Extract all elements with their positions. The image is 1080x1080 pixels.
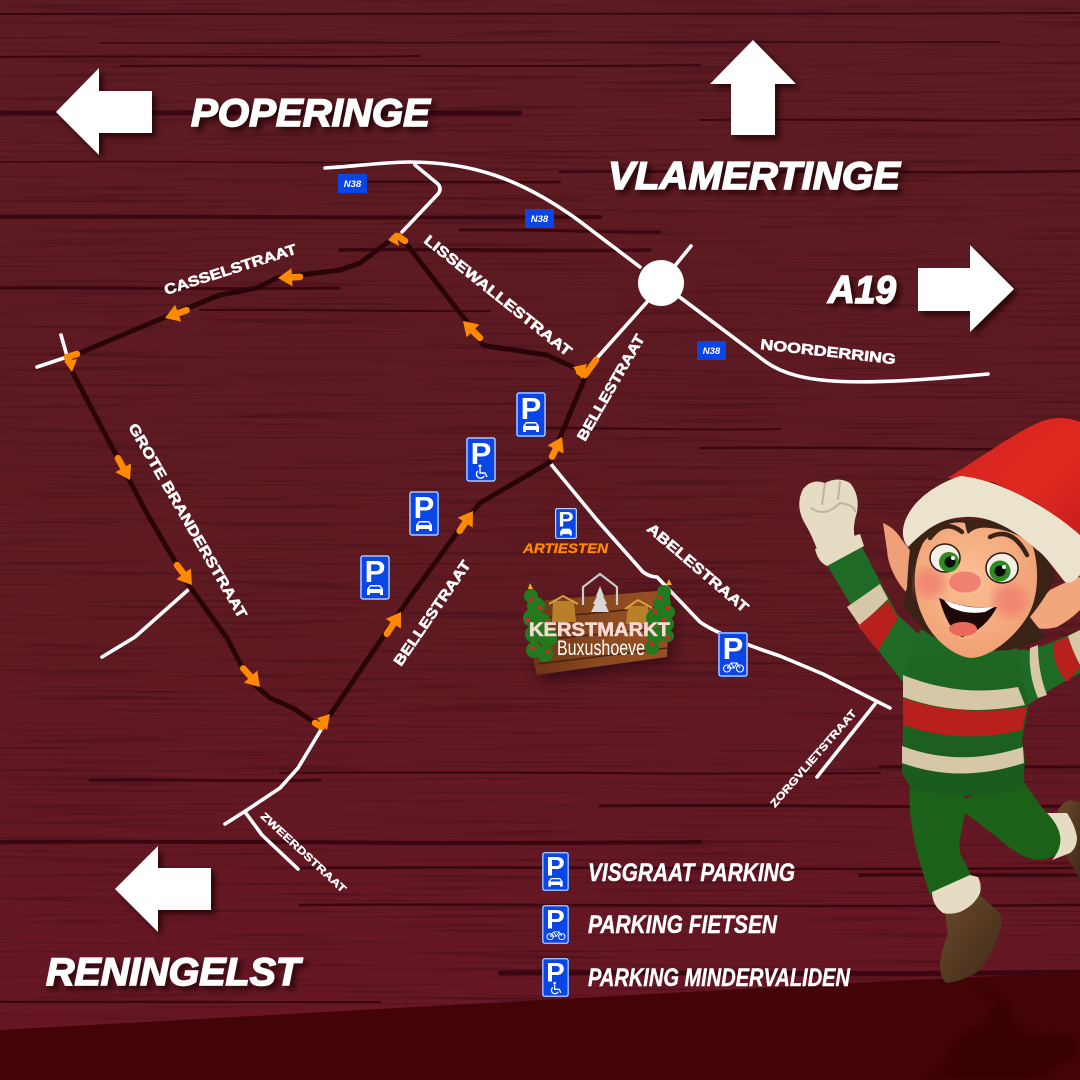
arrow: A19 <box>918 245 1014 332</box>
parking sign: artiesten: P <box>558 507 574 531</box>
elf: eyebrows <box>930 526 1027 555</box>
roundabout <box>638 260 684 306</box>
N38 badges <box>338 174 726 360</box>
legend item: parking mindervaliden <box>542 957 851 997</box>
heading: Poperinge: POPERINGE <box>191 92 431 135</box>
logo: Kerstmarkt Buxushoeve <box>523 574 675 682</box>
arrow: Reningelst <box>115 846 211 932</box>
street labels: LISSEWALLESTRAAT <box>421 233 574 360</box>
street labels: CASSELSTRAAT <box>162 242 299 299</box>
street labels: ZWEERDSTRAAT <box>258 810 349 896</box>
heading: A19: A19 <box>827 269 896 312</box>
parking sign: car <box>409 490 439 536</box>
route in dark <box>73 242 585 723</box>
parking sign: bicycles: P <box>723 631 743 666</box>
elf character <box>799 418 1080 983</box>
heading: Vlamertinge: VLAMERTINGE <box>608 155 901 198</box>
elf: cheeks <box>915 568 1027 617</box>
legend item: visgraat parking: P <box>546 851 565 881</box>
elf: sweater <box>902 630 1028 796</box>
elf: left leg and boot <box>910 788 1002 983</box>
elf: hair <box>903 520 1055 651</box>
legend item: parking fietsen: P <box>546 904 565 934</box>
orange direction arrows <box>64 232 596 730</box>
parking sign: car <box>360 554 390 600</box>
legend item: visgraat parking: VISGRAAT PARKING <box>588 859 795 887</box>
street labels: ABELESTRAAT <box>643 521 751 616</box>
parking sign: wheelchair <box>466 436 496 482</box>
arrow: Vlamertinge <box>710 40 796 135</box>
legend <box>542 851 851 997</box>
street labels <box>125 233 896 896</box>
parking sign: bicycles <box>718 631 748 677</box>
legend item: parking fietsen: PARKING FIETSEN <box>588 911 778 939</box>
street labels: BELLESTRAAT <box>575 332 649 444</box>
street labels: BELLESTRAAT <box>391 558 475 669</box>
elf: eyes <box>930 544 1018 583</box>
white road network <box>37 162 988 869</box>
parking sign: car: P <box>414 490 434 525</box>
elf: nose <box>949 572 981 592</box>
elf: face <box>915 522 1037 658</box>
parking sign: car <box>516 391 546 437</box>
logo: Kerstmarkt Buxushoeve: KERSTMARKT <box>529 620 670 641</box>
heading: Reningelst: RENINGELST <box>46 951 303 994</box>
parking sign: wheelchair: P <box>471 436 491 471</box>
elf: raised arm <box>799 480 925 685</box>
N38 badges: N38 <box>344 179 362 190</box>
N38 badges: N38 <box>703 346 721 357</box>
parking sign: car: P <box>521 391 541 426</box>
elf: right leg and boot <box>960 780 1080 880</box>
parking sign: artiesten <box>555 507 577 539</box>
logo: Kerstmarkt Buxushoeve: Buxushoeve <box>557 637 645 660</box>
parking sign: car: P <box>365 554 385 589</box>
street labels: ZORGVLIETSTRAAT <box>768 707 860 810</box>
elf: hat <box>903 418 1080 583</box>
legend item: parking fietsen <box>542 904 778 944</box>
elf: right ear <box>1028 577 1080 629</box>
elf: mouth <box>939 598 997 637</box>
legend item: parking mindervaliden: PARKING MINDERVALIDEN <box>588 964 851 992</box>
elf shadow on ground <box>915 985 1080 1080</box>
legend item: parking mindervaliden: P <box>546 957 565 987</box>
label: artiesten: ARTIESTEN <box>522 541 608 556</box>
elf: left ear <box>883 523 912 598</box>
ground band <box>0 972 1080 1080</box>
street labels: NOORDERRING <box>760 337 896 368</box>
N38 badges: N38 <box>531 214 549 225</box>
street labels: GROTE BRANDERSTRAAT <box>125 421 249 621</box>
arrow: Poperinge <box>56 68 152 155</box>
elf: right arm <box>1015 630 1080 705</box>
legend item: visgraat parking <box>542 851 795 891</box>
